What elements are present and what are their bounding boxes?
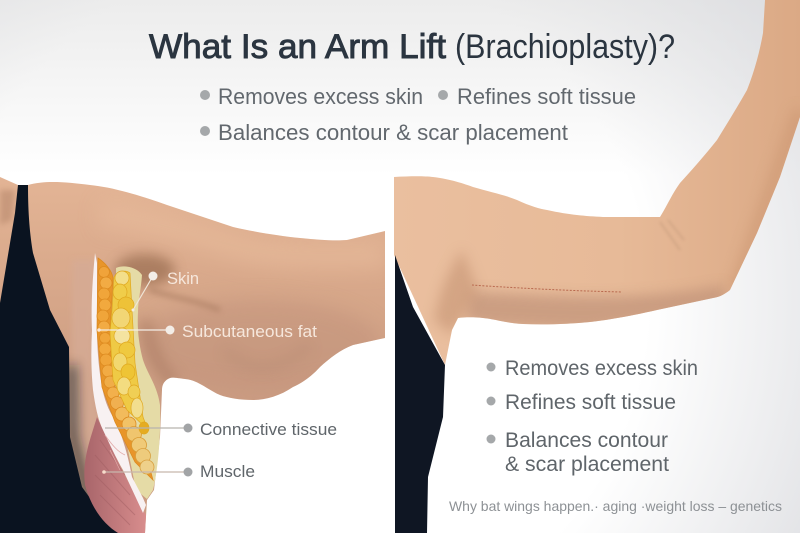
- yellow fat lobules: [110, 271, 149, 434]
- scar line: [472, 285, 622, 292]
- label: skin: [132, 269, 199, 312]
- anatomy cross section: [84, 253, 160, 533]
- label: subcutaneous fat: Subcutaneous fat: [182, 322, 317, 341]
- arm skin: [394, 0, 800, 400]
- title: What Is an Arm Lift: [149, 28, 447, 66]
- anatomy labels: [97, 269, 337, 481]
- top bullet list: Balances contour & scar placement: [218, 120, 568, 145]
- panel: after arm with incision: [394, 0, 800, 533]
- white connective tissue: [91, 253, 146, 513]
- lower bullet list: [486, 357, 698, 476]
- title: [149, 28, 675, 66]
- top bullet list: [200, 84, 636, 145]
- lower bullet list: Removes excess skin: [505, 357, 698, 380]
- footer note: Why bat wings happen.· aging ·weight loss – genetics: [449, 498, 782, 514]
- lower bullet list: & scar placement: [505, 453, 669, 476]
- pale outer fat layer: [116, 266, 160, 499]
- top bullet list: Refines soft tissue: [457, 84, 636, 109]
- black top: [395, 255, 445, 533]
- lower bullet list: Refines soft tissue: [505, 391, 676, 414]
- label: skin: Skin: [167, 269, 199, 288]
- top bullet list: Removes excess skin: [218, 84, 423, 109]
- black top: [0, 185, 130, 533]
- lower bullet list: Balances contour: [505, 429, 668, 452]
- label: muscle: Muscle: [200, 462, 255, 481]
- label: connective tissue: [105, 420, 337, 439]
- label: connective tissue: Connective tissue: [200, 420, 337, 439]
- label: subcutaneous fat: [97, 322, 317, 341]
- arm and shoulder skin: [0, 177, 385, 532]
- label: muscle: [102, 462, 255, 481]
- orange fat lobules: [97, 258, 154, 480]
- panel: before arm with anatomy: [0, 177, 385, 533]
- title: (Brachioplasty)?: [455, 28, 675, 66]
- muscle: [84, 417, 146, 533]
